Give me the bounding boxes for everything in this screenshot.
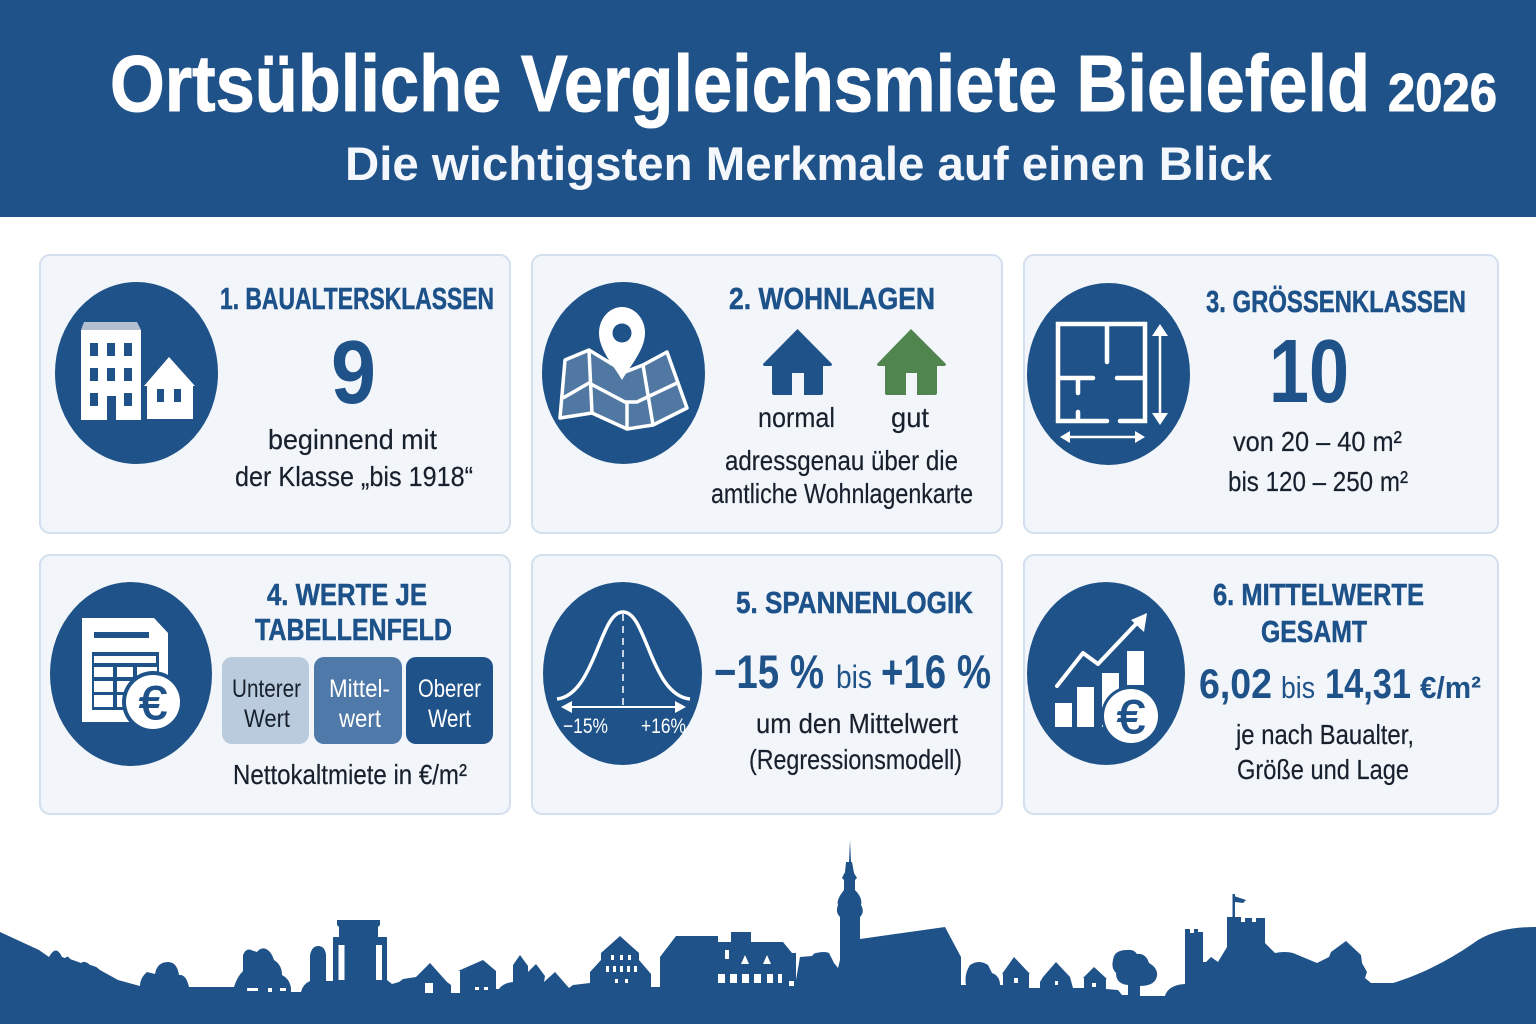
description: Nettokaltmiete in €/m² (233, 759, 467, 790)
skyline windows (247, 945, 1096, 993)
heading: 1. BAUALTERSKLASSEN (220, 281, 494, 316)
description (1235, 719, 1414, 785)
description (711, 445, 973, 509)
box: Unterer Wert: Unterer (232, 675, 301, 703)
box: Mittelwert: Mittel- (329, 675, 390, 703)
box: Mittelwert: wert (338, 705, 381, 733)
panel: 3. Größenklassen (1024, 255, 1498, 533)
heading: 6. MITTELWERTE (1213, 577, 1424, 612)
description: adressgenau über die (725, 445, 958, 476)
heading: 2. WOHNLAGEN (729, 281, 935, 316)
range values (714, 645, 991, 698)
box: Oberer Wert: Wert (428, 705, 471, 733)
box: Mittelwert (314, 657, 402, 744)
heading (255, 577, 452, 647)
description: der Klasse „bis 1918“ (235, 461, 473, 492)
title: 2026 (1388, 63, 1497, 123)
icon: bell curve (543, 582, 702, 765)
description: bis 120 – 250 m² (1228, 466, 1408, 497)
icon: green house, gut: gut (891, 402, 929, 433)
panel: 5. Spannenlogik (532, 555, 1002, 814)
heading: 3. GRÖSSENKLASSEN (1206, 284, 1466, 319)
panel: 6. Mittelwerte gesamt (1024, 555, 1498, 814)
icon: floor plan (1027, 283, 1190, 465)
number: 10 (1269, 322, 1349, 422)
icon: rising chart with euro (1027, 582, 1185, 765)
icon: bell curve: −15% (563, 715, 608, 738)
range values: −15 % (714, 645, 824, 698)
description: von 20 – 40 m² (1233, 426, 1402, 457)
heading: 4. WERTE JE (267, 577, 427, 612)
icon: buildings (55, 282, 218, 464)
box: Unterer Wert: Wert (244, 705, 290, 733)
description (749, 708, 962, 775)
description: Größe und Lage (1237, 754, 1409, 785)
number: 9 (331, 323, 376, 423)
icon: map with pin (542, 282, 705, 464)
range values: +16 % (881, 645, 991, 698)
box: Oberer Wert: Oberer (418, 675, 481, 703)
description: um den Mittelwert (756, 708, 958, 739)
range values: 6,02 (1199, 660, 1272, 707)
heading: GESAMT (1261, 614, 1367, 649)
description: beginnend mit (268, 424, 437, 455)
icon: rising chart with euro: € (1117, 690, 1145, 743)
box: Oberer Wert (406, 657, 493, 744)
range values: bis (836, 659, 872, 695)
icon: table document with euro: € (139, 676, 167, 729)
range values (1199, 660, 1481, 707)
icon: blue house, normal: normal (758, 402, 835, 433)
icon: blue house, normal (758, 329, 835, 433)
range values: €/m² (1420, 670, 1481, 705)
box: Unterer Wert (222, 657, 309, 744)
city skyline silhouette (0, 840, 1536, 1024)
castle flag (1232, 894, 1246, 917)
description (1228, 426, 1408, 497)
description: amtliche Wohnlagenkarte (711, 478, 973, 509)
description: (Regressionsmodell) (749, 744, 962, 775)
heading: 5. SPANNENLOGIK (736, 585, 974, 620)
heading: TABELLENFELD (255, 612, 452, 647)
panel: 1. Baualtersklassen (40, 255, 510, 533)
range values: 14,31 (1325, 660, 1411, 707)
panel: 2. Wohnlagen (532, 255, 1002, 533)
icon: table document with euro (50, 582, 212, 766)
icon: green house, gut (877, 329, 946, 433)
description (235, 424, 473, 492)
heading (1213, 577, 1424, 649)
range values: bis (1281, 670, 1315, 705)
header banner (0, 0, 1536, 217)
subtitle: Die wichtigsten Merkmale auf einen Blick (345, 137, 1273, 190)
title: Ortsübliche Vergleichsmiete Bielefeld (110, 39, 1370, 128)
icon: bell curve: +16% (641, 715, 686, 738)
panel: 4. Werte je Tabellenfeld (40, 555, 510, 814)
description: je nach Baualter, (1235, 719, 1414, 750)
